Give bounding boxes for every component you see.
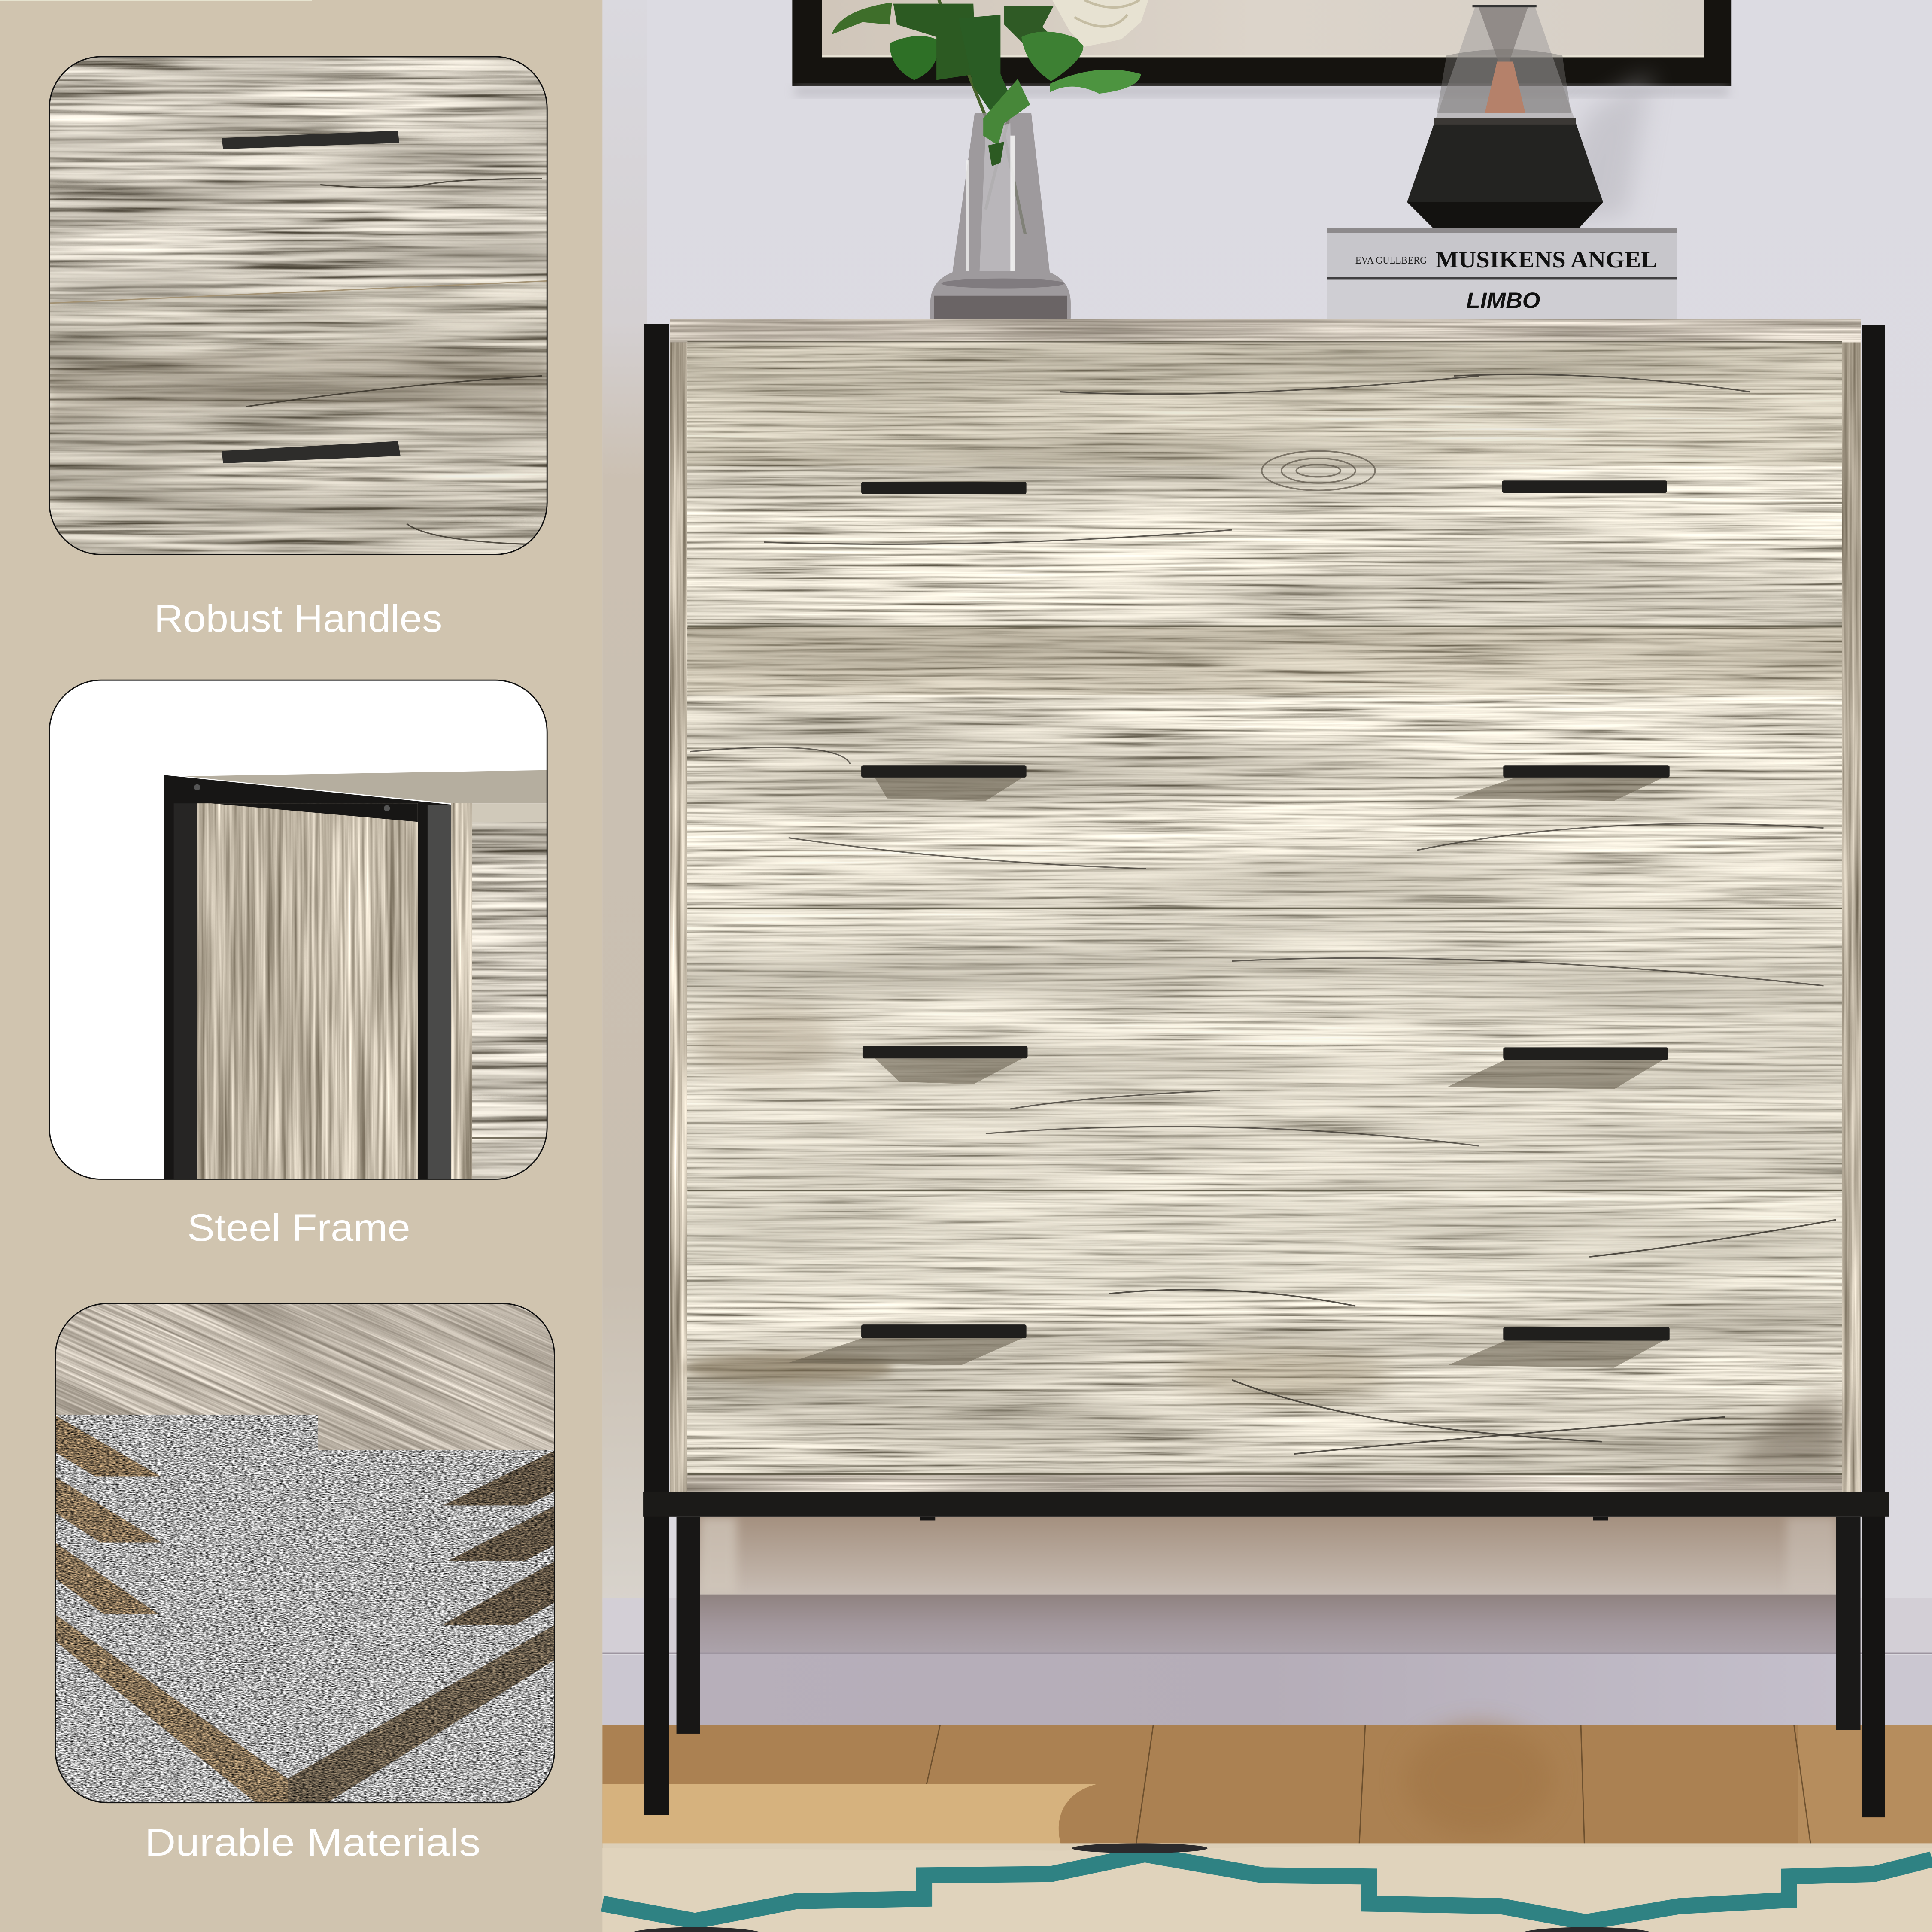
panel: steel frame (49, 680, 547, 1249)
diffuser on books (1407, 5, 1603, 235)
black base (1407, 123, 1603, 235)
drawer 1 (687, 343, 1842, 626)
framed picture (792, 0, 1731, 96)
wall (602, 0, 1932, 1725)
steel frame front legs and bar (643, 324, 1889, 1817)
object shadows on wall (1540, 74, 1651, 222)
patterned rug (602, 1843, 1932, 1932)
vase with flowers (832, 0, 1148, 323)
detail photo: stacked boards (0, 953, 933, 1917)
panel: robust handles (49, 57, 547, 640)
white rose (1052, 0, 1148, 47)
panel: durable materials (0, 953, 933, 1917)
caption: Robust Handles: Robust Handles (154, 597, 442, 640)
caption: Steel Frame: Steel Frame (187, 1206, 410, 1249)
panel: beige sidebar background (0, 0, 602, 1932)
board edge faces: left (55, 1415, 318, 1610)
book title: MUSIKENS ANGEL (1435, 246, 1657, 273)
back legs (677, 1517, 1861, 1734)
upper handle (222, 131, 399, 149)
drawer 4 (684, 1191, 1842, 1473)
book author: EVA GULLBERG (1355, 255, 1427, 266)
stacked books (1327, 228, 1677, 323)
stems (939, 0, 1025, 234)
lower board tops (55, 1452, 555, 1633)
panel outline (49, 57, 547, 554)
dresser (643, 319, 1889, 1817)
photo: room scene (602, 0, 1932, 1932)
panel outline (49, 680, 547, 1179)
baseboard (602, 1595, 1932, 1725)
panel outline (55, 1303, 554, 1803)
drawer handles (861, 480, 1670, 1340)
cabinet side strips and top (670, 319, 1861, 1495)
handle shadows (789, 778, 1663, 1368)
caption: Durable Materials: Durable Materials (145, 1821, 480, 1864)
glass dome (1434, 7, 1576, 123)
second book title: LIMBO (1466, 288, 1540, 313)
leaves (832, 3, 1141, 166)
top edge highlight (0, 0, 312, 1)
drawer gaps (687, 625, 1842, 1475)
glass vase (930, 113, 1071, 323)
wood floor (602, 1725, 1932, 1848)
detail photo: drawer handles (49, 57, 547, 554)
lower handle (222, 441, 401, 463)
drawer 3 (687, 909, 1842, 1190)
detail photo: steel frame corner (49, 680, 547, 1179)
board edge faces: right (317, 1450, 555, 1610)
drawer 2 (687, 627, 1842, 908)
